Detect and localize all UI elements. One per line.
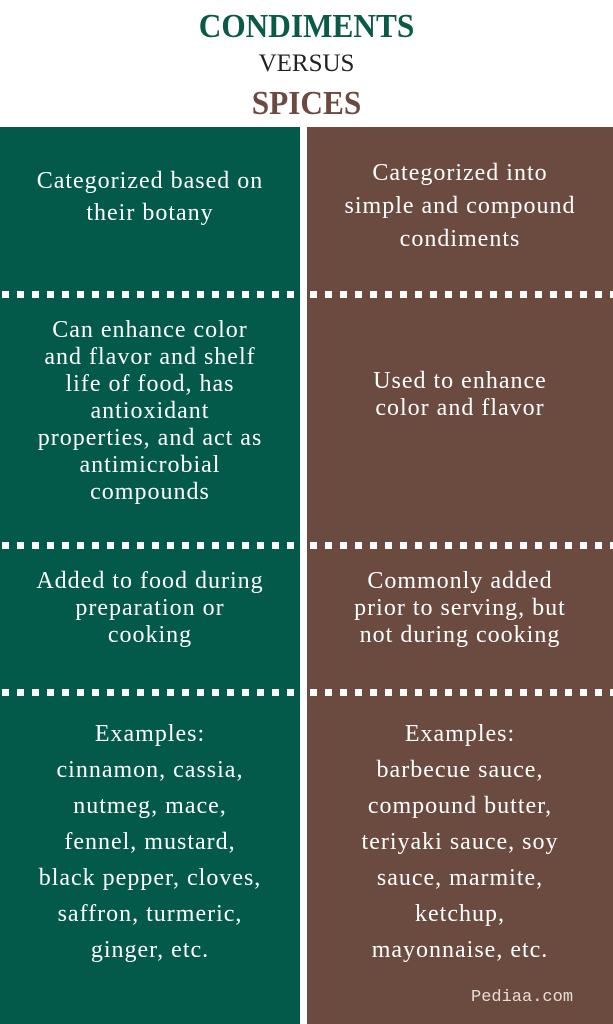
heading: condiments: CONDIMENTS <box>199 8 414 45</box>
text: right row 3 <box>354 568 566 648</box>
text: left row 1 <box>37 168 263 226</box>
text: left row 2: antimicrobial <box>80 452 220 478</box>
text: left examples <box>38 721 261 963</box>
text: left examples: fennel, mustard, <box>64 829 236 855</box>
text: right row 2: Used to enhance <box>373 368 547 394</box>
text: left examples: Examples: <box>95 721 205 747</box>
text: left row 3: Added to food during <box>36 568 264 594</box>
text: left row 2: life of food, has <box>66 371 234 397</box>
text: left row 1: their botany <box>86 200 214 226</box>
text: left row 1: Categorized based on <box>37 168 263 194</box>
text: right row 2 <box>373 368 547 421</box>
text: right examples: barbecue sauce, <box>377 757 543 783</box>
heading: spices: SPICES <box>252 85 361 122</box>
panel: left column <box>0 127 300 1024</box>
text: right examples: sauce, marmite, <box>377 865 543 891</box>
heading: versus: VERSUS <box>259 50 354 77</box>
text: left examples: ginger, etc. <box>91 937 209 963</box>
text: left row 2: and flavor and shelf <box>44 344 256 370</box>
text: left examples: black pepper, cloves, <box>39 865 261 891</box>
title <box>199 8 414 122</box>
text: left examples: nutmeg, mace, <box>73 793 227 819</box>
text: right row 1 <box>345 160 575 252</box>
text: left examples: cinnamon, cassia, <box>57 757 243 783</box>
text: right row 3: Commonly added <box>367 568 553 594</box>
text: right row 1: Categorized into <box>372 160 548 186</box>
text: left row 3: preparation or <box>75 595 225 621</box>
text: right examples <box>362 721 558 963</box>
text: right row 3: not during cooking <box>360 622 560 648</box>
text: left row 2: Can enhance color <box>52 317 248 343</box>
text: right examples: Examples: <box>405 721 515 747</box>
text: left examples: saffron, turmeric, <box>58 901 242 927</box>
text: left row 2 <box>38 317 262 505</box>
text: left row 3 <box>36 568 264 648</box>
text: right row 1: condiments <box>400 226 520 252</box>
text: left row 2: antioxidant <box>90 398 209 424</box>
panel: right column <box>307 127 613 1024</box>
text: left row 2: properties, and act as <box>38 425 262 451</box>
text: right row 1: simple and compound <box>345 193 575 219</box>
text: right row 3: prior to serving, but <box>354 595 566 621</box>
text: right examples: compound butter, <box>368 793 552 819</box>
text: left row 2: compounds <box>90 479 210 505</box>
text: right examples: ketchup, <box>415 901 505 927</box>
logo: pediaa.com: Pediaa.com <box>471 988 573 1007</box>
text: left row 3: cooking <box>108 622 192 648</box>
text: right examples: mayonnaise, etc. <box>372 937 548 963</box>
text: right row 2: color and flavor <box>375 395 545 421</box>
text: right examples: teriyaki sauce, soy <box>362 829 558 855</box>
